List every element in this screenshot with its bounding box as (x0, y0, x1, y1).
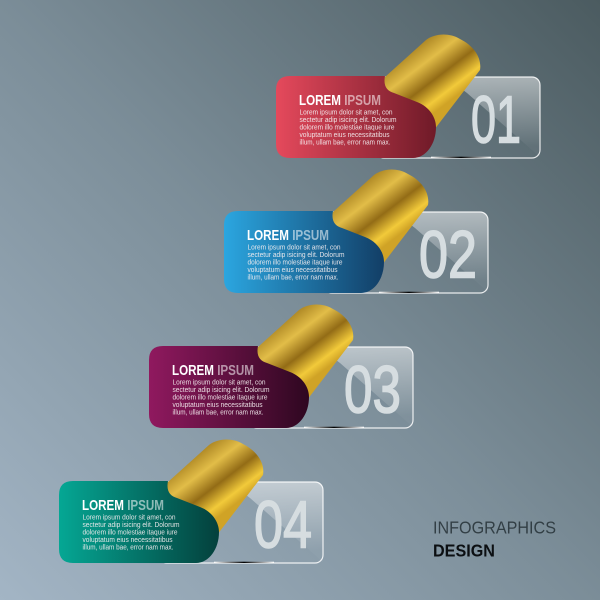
glass panel 01 (376, 77, 540, 158)
card 04 (59, 440, 323, 563)
gold fold 01 (376, 35, 480, 130)
heading 04: LOREM IPSUM (82, 498, 164, 514)
title: infographics design (433, 518, 556, 560)
number 01: 01 (471, 82, 521, 158)
body text 02: dolorem illo molestiae itaque iure (248, 258, 342, 266)
body text 01: dolorem illo molestiae itaque iure (300, 122, 394, 132)
heading 03: LOREM IPSUM (172, 363, 254, 379)
body text 03: illum, ullam bae, error nam max. (172, 408, 264, 416)
body text 02: Lorem ipsum dolor sit amet, con (248, 242, 340, 252)
label panel 04 (59, 481, 219, 563)
body text 01: sectetur adip isicing elit. Dolorum (300, 115, 396, 124)
body text 02: illum, ullam bae, error nam max. (248, 272, 338, 282)
glass panel 03 (249, 347, 413, 428)
body text 02: voluptatum eius necessitatibus (248, 265, 338, 274)
body text 01 (300, 108, 396, 146)
number 02: 02 (419, 218, 477, 292)
body text 04: voluptatum eius necessitatibus (82, 535, 173, 544)
glass panel 02 (324, 212, 488, 293)
label panel 02 (224, 211, 384, 293)
number 04: 04 (254, 488, 312, 562)
gold fold 03 (249, 305, 353, 400)
body text 04 (82, 512, 180, 552)
body text 03: dolorem illo molestiae itaque iure (172, 392, 268, 402)
body text 01: voluptatum eius necessitatibus (300, 130, 390, 139)
card 01 (276, 35, 540, 158)
number 03: 03 (344, 352, 401, 428)
body text 04: Lorem ipsum dolor sit amet, con (82, 512, 176, 522)
title: infographics design: INFOGRAPHICS (433, 518, 556, 538)
body text 02 (248, 242, 344, 282)
body text 02: sectetur adip isicing elit. Dolorum (248, 250, 344, 259)
body text 03: Lorem ipsum dolor sit amet, con (172, 378, 266, 386)
gold fold 04 (159, 440, 263, 535)
heading 01: LOREM IPSUM (299, 93, 381, 109)
body text 04: illum, ullam bae, error nam max. (82, 542, 174, 552)
label panel 03 (149, 346, 309, 428)
body text 04: sectetur adip isicing elit. Dolorum (82, 520, 180, 529)
title: infographics design: DESIGN (433, 540, 495, 560)
glass panel 04 (159, 482, 323, 563)
body text 01: Lorem ipsum dolor sit amet, con (300, 108, 392, 116)
body text 01: illum, ullam bae, error nam max. (300, 138, 390, 146)
body text 03 (172, 378, 270, 416)
heading 02: LOREM IPSUM (247, 228, 329, 244)
card 02 (224, 170, 488, 293)
body text 03: voluptatum eius necessitatibus (172, 400, 263, 409)
body text 04: dolorem illo molestiae itaque iure (82, 528, 178, 536)
gold fold 02 (324, 170, 428, 265)
body text 03: sectetur adip isicing elit. Dolorum (172, 385, 270, 394)
card 03 (149, 305, 413, 428)
label panel 01 (276, 76, 436, 158)
